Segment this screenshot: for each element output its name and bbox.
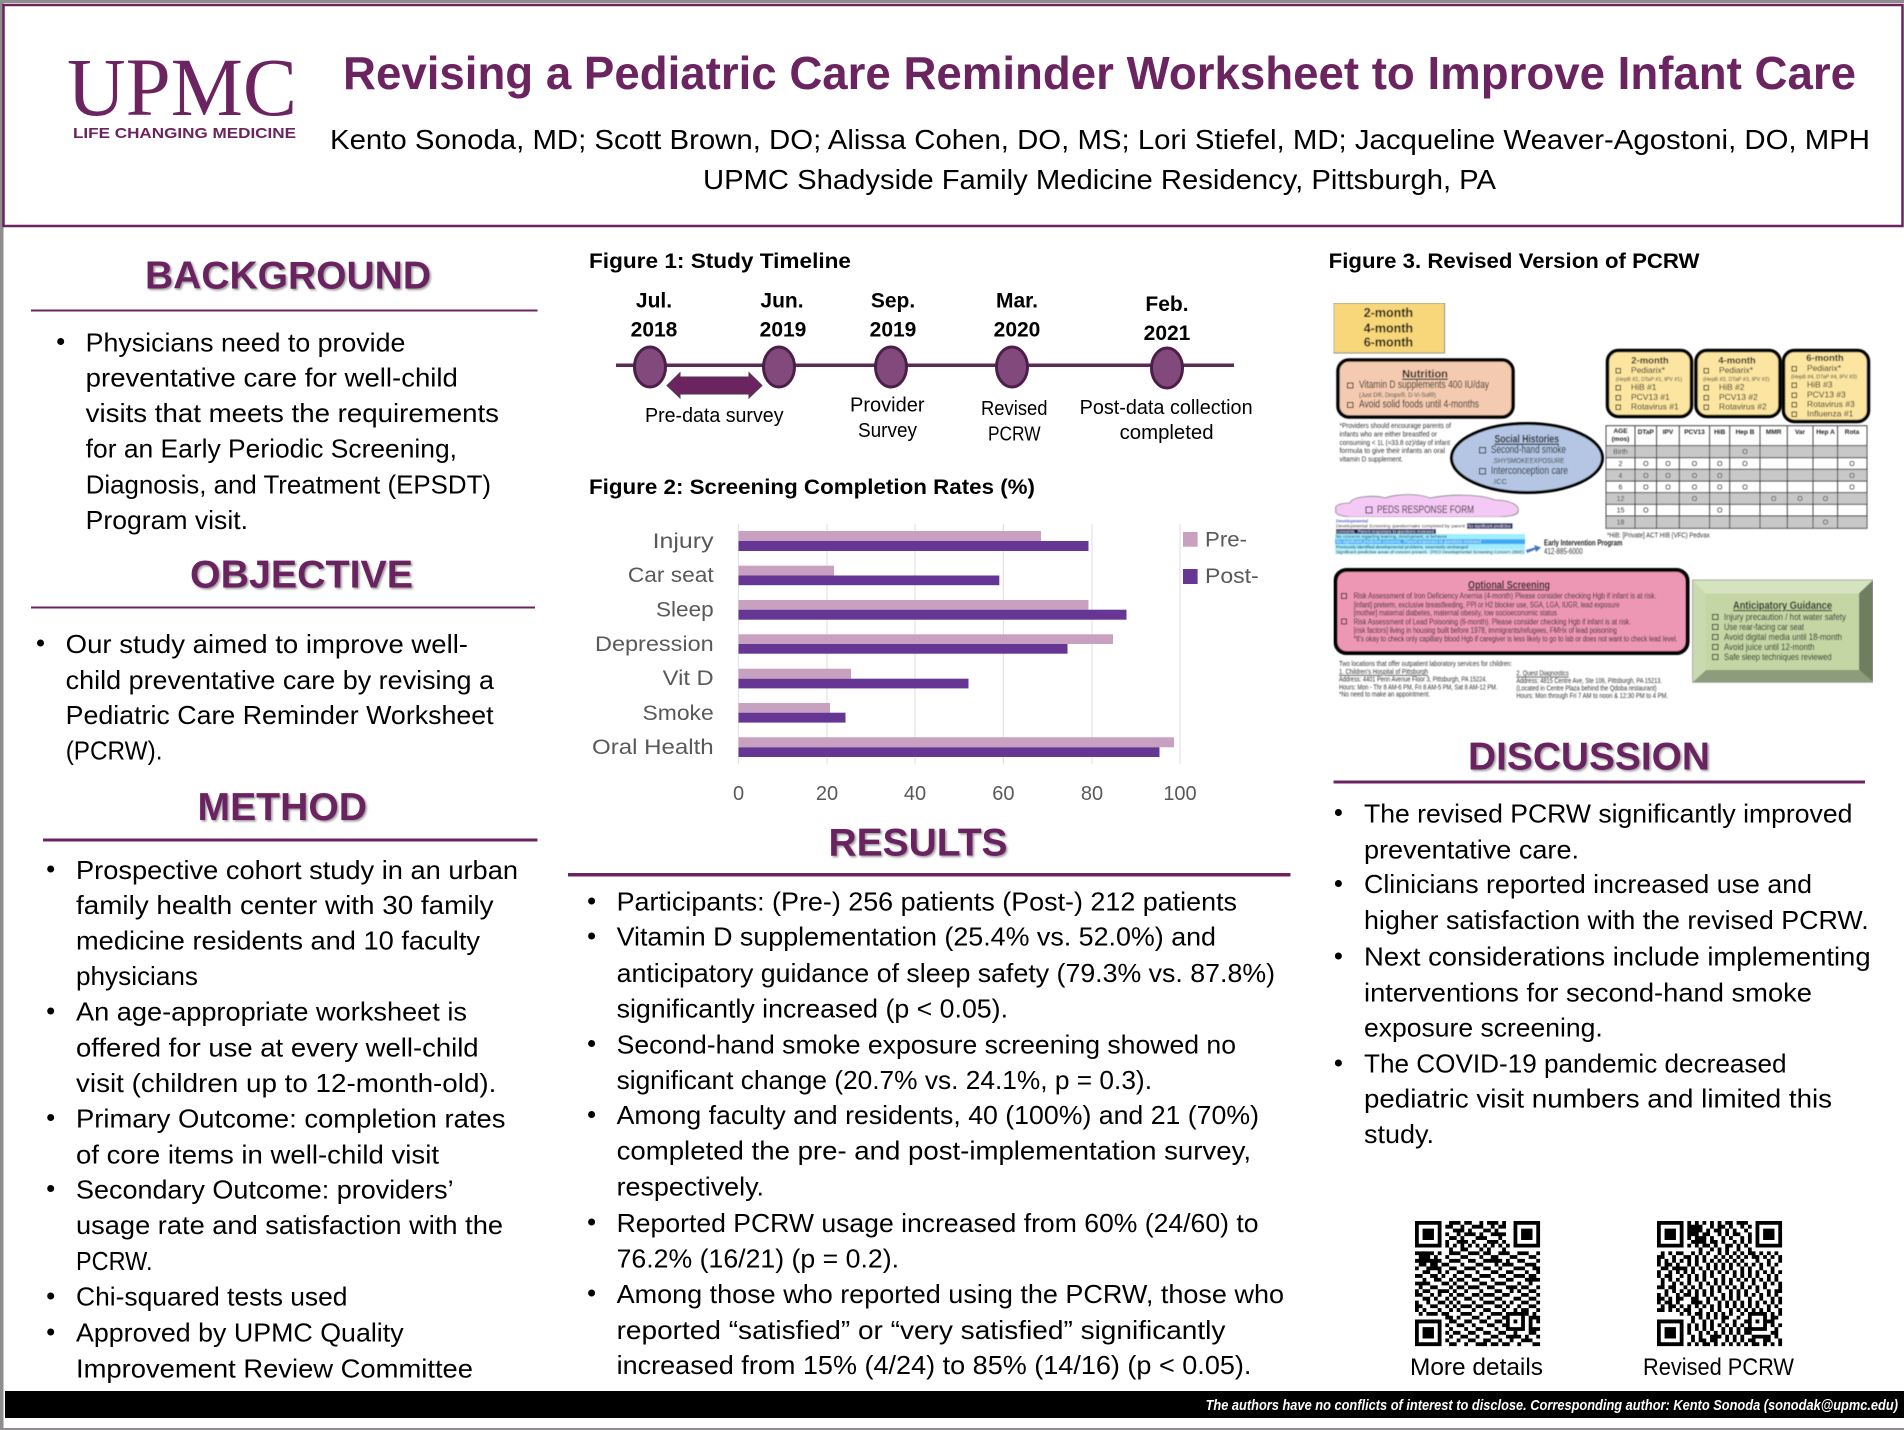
timeline dates: Jul.	[636, 290, 672, 313]
laboratory locations: Address: 4815 Centre Ave, Ste 106, Pittsburgh, PA 15213.	[1516, 676, 1662, 685]
axis labels: 40	[904, 783, 926, 805]
objective text: Our study aimed to improve well-	[66, 629, 468, 659]
timeline dates: 2019	[870, 319, 916, 342]
results bullet: PCRW usage	[588, 1208, 1258, 1273]
vaccine schedule table: O	[1692, 496, 1698, 503]
vaccine schedule table: O	[1643, 508, 1649, 514]
vaccine schedule table: O	[1797, 496, 1803, 503]
heading: discussion: DISCUSSION	[1468, 735, 1710, 778]
vaccine box: 6-month: Rotavirus #3	[1807, 399, 1855, 409]
discussion bullet: next considerations	[1335, 942, 1871, 1043]
timeline captions	[645, 394, 1253, 446]
category labels	[592, 530, 714, 759]
results bullet: PCRW usage: Reported PCRW usage increased from 60% (24/60) to	[617, 1208, 1258, 1238]
vaccine schedule table: O	[1849, 473, 1855, 480]
results bullet: satisfaction: increased from 15% (4/24) to 85% (14/16) (p < 0.05).	[617, 1350, 1251, 1380]
laboratory locations: Address: 4401 Penn Avenue Floor 3, Pittsburgh, PA 15224.	[1339, 674, 1487, 683]
timeline captions: completed	[1120, 421, 1214, 444]
panel: background	[31, 254, 538, 535]
vaccine box: 2-month: 2-month	[1631, 355, 1669, 366]
results bullet: survey completion: Among faculty and residents, 40 (100%) and 21 (70%)	[617, 1100, 1259, 1130]
panel: discussion	[1334, 735, 1871, 1149]
timeline dates: Mar.	[996, 290, 1038, 313]
social histories ellipse: Interconception care	[1491, 465, 1568, 477]
background text	[57, 328, 499, 535]
vaccine box: 2-month: Pediarix*	[1631, 365, 1666, 375]
legend: Post-	[1205, 565, 1259, 588]
timeline captions: Pre-data survey	[645, 404, 784, 427]
discussion bullet: improved care: preventative care.	[1364, 834, 1579, 864]
vaccine schedule table	[1606, 426, 1867, 528]
laboratory locations: Hours: Mon - Thr 8 AM-6 PM, Fri 8 AM-5 PM, Sat 8 AM-12 PM.	[1339, 682, 1498, 691]
anticipatory guidance box: Avoid juice until 12-month	[1724, 642, 1814, 653]
anticipatory guidance box: Injury precaution / hot water safety	[1724, 612, 1846, 623]
axis labels: 100	[1163, 783, 1197, 805]
peds response form cloud	[1336, 495, 1518, 517]
bar chart	[592, 524, 1259, 805]
vaccine schedule table: Var	[1795, 429, 1806, 436]
method bullet: primary outcome	[47, 1103, 505, 1170]
vaccine schedule table: O	[1717, 473, 1723, 480]
optional screening box: [infant] preterm, exclusive breastfeeding, PPI or H2 blocker use, SGA, LGA, IUGR, lead exposure	[1354, 600, 1620, 609]
laboratory locations: *No need to make an appointment.	[1339, 690, 1430, 699]
background text: Diagnosis, and Treatment (EPSDT)	[86, 469, 491, 499]
vaccine schedule table: O	[1823, 496, 1829, 503]
provider note: infants who are either breastfed or	[1340, 430, 1437, 439]
category labels: Oral Health	[592, 736, 714, 759]
pre bars	[738, 531, 1174, 747]
post bars	[738, 541, 1160, 757]
method bullet: chi-squared: Chi-squared tests used	[76, 1282, 348, 1312]
method bullet: secondary outcome: PCRW.	[76, 1246, 152, 1276]
figure 1: study timeline	[589, 250, 1253, 446]
results bullet: smoke exposure: Second-hand smoke exposure screening showed no	[617, 1030, 1236, 1060]
method bullet: secondary outcome	[47, 1174, 503, 1276]
method bullet: prospective cohort: family health center with 30 family	[76, 890, 494, 920]
discussion bullet: COVID-19: pediatric visit numbers and limited this	[1364, 1084, 1832, 1114]
header panel	[4, 5, 1902, 226]
provider note: *Providers should encourage parents of	[1340, 421, 1452, 430]
peds response table: No significant predictive	[1468, 524, 1511, 529]
axis labels: 80	[1081, 783, 1103, 805]
vaccine schedule table: 4	[1619, 473, 1623, 480]
provider note: formula to give their infants an oral	[1340, 446, 1445, 455]
QR code: revised PCRW	[1643, 1221, 1794, 1381]
background text: Program visit.	[86, 505, 248, 535]
panel: results	[568, 822, 1290, 1380]
vaccine schedule table: O	[1717, 461, 1723, 468]
discussion bullet: clinicians: higher satisfaction with the revised PCRW.	[1364, 905, 1869, 935]
figure 2 heading: Figure 2: Screening Completion Rates (%)	[589, 476, 1035, 499]
vaccine schedule table: Rota	[1845, 429, 1860, 436]
peds response table: No significant predictive concerns. Parent responses to questions reviewed	[1336, 539, 1481, 544]
vaccine schedule table: IPV	[1663, 429, 1674, 436]
optional screening box: Optional Screening	[1468, 579, 1550, 591]
method bullet: prospective cohort	[47, 855, 518, 991]
discussion bullet: improved care: The revised PCRW significantly improved	[1364, 798, 1852, 828]
vaccine box: 2-month: HiB #1	[1631, 382, 1657, 392]
footer bar	[5, 1391, 1904, 1418]
heading: method: METHOD	[198, 786, 367, 829]
results bullet: vitamin D and sleep: significantly increased (p < 0.05).	[617, 994, 1008, 1024]
visit age box	[1334, 303, 1444, 353]
objective text: child preventative care by revising a	[66, 665, 495, 695]
vaccine schedule table: O	[1665, 461, 1671, 468]
vaccine schedule table: O	[1643, 484, 1649, 492]
vaccine schedule table: O	[1742, 461, 1748, 468]
peds response table: Developmental	[1336, 518, 1368, 524]
category labels: Smoke	[642, 702, 714, 725]
axis labels	[733, 783, 1197, 805]
discussion bullet: next considerations: exposure screening.	[1364, 1013, 1603, 1043]
method bullet: worksheet	[47, 997, 496, 1098]
logo: UPMC Life Changing Medicine: LIFE CHANGING MEDICINE	[73, 125, 296, 142]
vaccine schedule table: O	[1643, 461, 1649, 468]
vaccine schedule table: O	[1665, 473, 1671, 480]
vaccine box: 6-month: 6-month	[1806, 353, 1844, 364]
timeline dates: 2019	[760, 319, 806, 342]
social histories ellipse: .ICC	[1492, 477, 1508, 486]
results bullet: vitamin D and sleep: Vitamin D supplementation (25.4% vs. 52.0%) and	[617, 922, 1216, 952]
method bullet: worksheet: offered for use at every well-child	[76, 1033, 479, 1063]
nutrition box: Vitamin D supplements 400 IU/day	[1359, 379, 1489, 391]
early intervention program: 412-885-6000	[1544, 547, 1583, 556]
method bullet: approval: Approved by UPMC Quality	[76, 1318, 404, 1348]
vaccine schedule table: O	[1849, 484, 1855, 492]
method bullet: primary outcome: of core items in well-child visit	[76, 1140, 440, 1170]
discussion bullet: next considerations: Next considerations include implementing	[1364, 942, 1871, 972]
anticipatory guidance box: Use rear-facing car seat	[1724, 622, 1804, 633]
panel: objective	[31, 554, 535, 766]
results bullet: vitamin D and sleep	[588, 922, 1275, 1024]
figure 1 heading: Figure 1: Study Timeline	[589, 250, 851, 273]
peds response table: No concerns regarding learning, development, or behavior	[1336, 534, 1447, 539]
laboratory locations: Hours: Mon through Fri 7 AM to noon & 12:30 PM to 4 PM.	[1516, 691, 1668, 700]
discussion bullet: COVID-19: The COVID-19 pandemic decreased	[1364, 1049, 1786, 1079]
anticipatory guidance box: Anticipatory Guidance	[1733, 600, 1832, 612]
results bullet: satisfaction: Among those who reported using the PCRW, those who	[617, 1279, 1284, 1309]
heading: results: RESULTS	[828, 822, 1008, 865]
vaccine box: 6-month: HiB #3	[1807, 380, 1833, 390]
vaccine schedule table: 2	[1619, 461, 1623, 468]
logo: UPMC Life Changing Medicine: UPMC	[67, 41, 297, 133]
figure 3 heading: Figure 3. Revised Version of PCRW	[1329, 250, 1700, 273]
discussion bullet: improved care	[1335, 798, 1852, 864]
results bullet: vitamin D and sleep: anticipatory guidance of sleep safety (79.3% vs. 87.8%)	[617, 958, 1275, 988]
background text: for an Early Periodic Screening,	[86, 433, 457, 463]
arrow: to early intervention	[1526, 545, 1541, 553]
method bullet: approval	[47, 1318, 473, 1384]
anticipatory guidance box	[1693, 580, 1873, 682]
timeline captions: Provider	[850, 394, 925, 417]
category labels: Vit D	[663, 667, 714, 690]
nutrition box: Nutrition	[1402, 369, 1448, 381]
visit age box: 4-month	[1364, 322, 1413, 336]
method bullet: secondary outcome: usage rate and satisfaction with the	[76, 1210, 503, 1240]
discussion bullet: next considerations: interventions for second-hand smoke	[1364, 978, 1812, 1008]
method bullet: primary outcome: Primary Outcome: completion rates	[76, 1103, 505, 1133]
laboratory locations: (Located in Centre Plaza behind the Qdoba restaurant)	[1516, 683, 1657, 692]
QR modules: more details	[1415, 1221, 1540, 1346]
vaccine box: 6-month: Influenza #1	[1807, 409, 1854, 419]
timeline dates: Jun.	[760, 290, 804, 313]
results bullet: survey completion: respectively.	[617, 1172, 764, 1202]
vaccine schedule table: DTaP	[1638, 429, 1655, 436]
laboratory locations	[1339, 659, 1668, 700]
heading: objective: OBJECTIVE	[190, 554, 413, 596]
vaccine schedule table: O	[1692, 484, 1698, 492]
optional screening box	[1336, 570, 1688, 653]
timeline dates	[631, 290, 1191, 345]
method bullet: prospective cohort: Prospective cohort study in an urban	[76, 855, 518, 885]
vaccine box: 4-month: (HepB #3, DTaP #3, IPV #2)	[1703, 377, 1770, 383]
vaccine box: 6-month: (HepB #4, DTaP #4, IPV #3)	[1791, 375, 1857, 381]
vaccine schedule table: O	[1849, 461, 1855, 468]
category labels: Sleep	[656, 599, 714, 622]
vaccine schedule table: O	[1742, 449, 1748, 456]
figure 2: screening completion rates	[589, 476, 1259, 805]
results bullet: survey completion: completed the pre- and post-implementation survey,	[617, 1136, 1251, 1166]
vaccine schedule table: 6	[1619, 484, 1623, 492]
results bullet: smoke exposure	[588, 1030, 1236, 1095]
method bullet: secondary outcome: Secondary Outcome: providers’	[76, 1174, 454, 1204]
timeline dates: 2018	[631, 319, 678, 342]
vaccine schedule table: O	[1692, 461, 1698, 468]
vaccine schedule table: (mos)	[1612, 436, 1629, 443]
vaccine box: 2-month: PCV13 #1	[1631, 392, 1670, 402]
vaccine schedule table: AGE	[1613, 428, 1628, 435]
authors: Kento Sonoda, MD; Scott Brown, DO; Alissa Cohen, DO, MS; Lori Stiefel, MD; Jacqueline Weaver-Agostoni, DO, MPH	[330, 124, 1870, 155]
QR code: more details	[1410, 1221, 1543, 1381]
vaccine schedule table: O	[1717, 508, 1723, 514]
results bullet: satisfaction: reported “satisfied” or “very satisfied” significantly	[617, 1315, 1225, 1345]
background text: Physicians need to provide	[86, 328, 405, 358]
provider note	[1340, 421, 1452, 464]
peds response table: Previously identified developmental problems, essentially unchanged	[1336, 544, 1468, 549]
vaccine schedule table: Hep B	[1736, 429, 1755, 436]
early intervention program	[1544, 538, 1623, 556]
vaccine schedule table: PCV13	[1684, 429, 1705, 436]
vaccine schedule table: 12	[1617, 496, 1624, 503]
method bullet: worksheet: An age-appropriate worksheet is	[76, 997, 467, 1027]
peds response form cloud: PEDS RESPONSE FORM	[1377, 504, 1474, 516]
vaccine schedule table: Hep A	[1816, 429, 1835, 436]
vaccine box: 6-month	[1784, 350, 1868, 422]
title: Revising a Pediatric Care Reminder Worksheet to Improve Infant Care	[343, 47, 1856, 99]
optional screening box: Risk Assessment of Lead Poisoning (6-month). Please consider checking Hgb if infant is at risk.	[1354, 617, 1631, 626]
QR modules: revised PCRW	[1657, 1221, 1782, 1346]
vaccine box: 2-month: Rotavirus #1	[1631, 401, 1679, 411]
discussion bullet: clinicians: Clinicians reported increased use and	[1364, 869, 1812, 899]
axis labels: 60	[992, 783, 1015, 805]
timeline dates: Sep.	[871, 290, 915, 313]
optional screening box: [risk factors] living in housing built before 1978, immigrants/refugees, FMHx of lead poisoning	[1354, 626, 1617, 635]
vaccine schedule table: 15	[1617, 508, 1624, 514]
visit age box: 6-month	[1364, 336, 1413, 350]
vaccine schedule table: 18	[1617, 520, 1624, 526]
vaccine schedule table: O	[1692, 473, 1698, 480]
legend: Pre-	[1205, 529, 1247, 552]
timeline captions: Post-data collection	[1080, 396, 1253, 419]
category labels: Injury	[653, 530, 714, 553]
affiliation: UPMC Shadyside Family Medicine Residency, Pittsburgh, PA	[703, 164, 1496, 195]
results bullet: satisfaction	[588, 1279, 1284, 1380]
heading: background: BACKGROUND	[145, 254, 431, 298]
vaccine box: 6-month: Pediarix*	[1807, 363, 1842, 373]
timeline line	[616, 364, 1234, 367]
anticipatory guidance box: Safe sleep techniques reviewed	[1724, 652, 1832, 663]
optional screening box: Risk Assessment of Iron Deficiency Anemia (4-month) Please consider checking Hgb if infant is at risk.	[1354, 592, 1657, 601]
peds response table: Significant predictive areas of concern present. (PEO Developmental Screening Concern Z80E)	[1336, 549, 1524, 554]
background text: visits that meets the requirements	[86, 398, 499, 428]
vaccine schedule table: O	[1643, 473, 1649, 480]
objective text: (PCRW).	[66, 736, 162, 766]
method bullet: prospective cohort: physicians	[76, 961, 198, 991]
early intervention program: Early Intervention Program	[1544, 538, 1623, 548]
vaccine schedule table: Birth	[1613, 449, 1628, 456]
vaccine box: 4-month: HiB #2	[1719, 382, 1745, 392]
category labels: Depression	[595, 633, 714, 656]
discussion bullet: COVID-19: study.	[1364, 1119, 1434, 1149]
timeline markers	[634, 347, 1182, 388]
background text: preventative care for well-child	[86, 363, 458, 393]
vaccine box: 4-month: Rotavirus #2	[1719, 401, 1767, 411]
axis labels: 0	[733, 783, 744, 805]
social histories ellipse	[1452, 424, 1602, 492]
vaccine schedule table: HiB	[1714, 429, 1726, 436]
vaccine schedule table: O	[1717, 484, 1723, 492]
method bullet: approval: Improvement Review Committee	[76, 1354, 473, 1384]
vaccine table footnote: *HiB: [Private] ACT HIB (VFC) Pedvax	[1607, 530, 1710, 539]
results bullet: participants: Participants: (Pre-) 256 patients (Post-) 212 patients	[617, 886, 1237, 916]
peds response table	[1334, 517, 1525, 554]
nutrition box: Avoid solid foods until 4-months	[1359, 399, 1479, 411]
timeline captions: Revised	[981, 397, 1048, 420]
results bullet: PCRW usage: 76.2% (16/21) (p = 0.2).	[617, 1243, 899, 1273]
laboratory locations: 1. Children's Hospital of Pittsburgh	[1339, 667, 1428, 676]
discussion bullet: clinicians	[1335, 869, 1869, 935]
laboratory locations: Two locations that offer outpatient laboratory services for children:	[1339, 659, 1512, 668]
anticipatory guidance box: Avoid digital media until 18-month	[1724, 632, 1842, 643]
vaccine box: 4-month: Pediarix*	[1719, 365, 1754, 375]
optional screening box: [mother] maternal diabetes, maternal obesity, low socioeconomic status	[1354, 608, 1557, 617]
vaccine schedule table: O	[1823, 520, 1829, 526]
vaccine schedule table: O	[1771, 496, 1777, 503]
category labels: Car seat	[628, 564, 714, 587]
worksheet image	[1334, 303, 1873, 700]
vaccine box: 6-month: PCV13 #3	[1807, 390, 1846, 400]
timeline dates: 2020	[994, 319, 1040, 342]
timeline dates: 2021	[1144, 322, 1191, 345]
timeline captions: Survey	[858, 419, 918, 442]
method bullet: worksheet: visit (children up to 12-month-old).	[76, 1068, 496, 1098]
vaccine schedule table: O	[1742, 484, 1748, 492]
peds response table: concerns. Parent responses to questions reviewed	[1337, 529, 1434, 534]
objective text	[37, 629, 495, 766]
vaccine box: 4-month	[1696, 350, 1780, 416]
panel: method	[43, 786, 538, 1384]
objective text: Pediatric Care Reminder Worksheet	[66, 700, 494, 730]
vaccine box: 4-month: PCV13 #2	[1719, 392, 1758, 402]
axis labels: 20	[816, 783, 838, 805]
social histories ellipse: Social Histories	[1494, 434, 1559, 446]
nutrition box	[1338, 360, 1513, 417]
timeline captions: PCRW	[988, 423, 1041, 446]
provider note: vitamin D supplement.	[1340, 455, 1403, 464]
peds response table: Developmental Screening questionnaire completed by parent:	[1336, 524, 1466, 529]
social histories ellipse: Second-hand smoke	[1491, 444, 1566, 456]
QR label: revised PCRW: Revised PCRW	[1643, 1354, 1794, 1381]
nutrition box: (Just D®, Drops®, D-Vi-Sol®)	[1359, 391, 1436, 399]
arrow: pre-data survey span	[667, 373, 762, 398]
provider note: consuming < 1L (≈33.8 oz)/day of infant	[1340, 438, 1451, 447]
results bullet: survey completion	[588, 1100, 1259, 1202]
laboratory locations: 2. Quest Diagnostics	[1516, 669, 1569, 678]
legend	[1183, 529, 1259, 588]
vaccine box: 4-month: 4-month	[1718, 355, 1756, 366]
method bullet: prospective cohort: medicine residents and 10 faculty	[76, 925, 480, 955]
timeline dates: Feb.	[1145, 293, 1189, 316]
vaccine box: 2-month	[1608, 350, 1692, 416]
discussion bullet: COVID-19	[1335, 1049, 1832, 1149]
vaccine schedule table: O	[1665, 484, 1671, 492]
figure 3: revised version of PCRW	[1329, 250, 1873, 700]
vaccine schedule table: MMR	[1766, 429, 1782, 436]
social histories ellipse: .SHYSMOKEEXPOSURE	[1492, 456, 1564, 465]
QR label: more details: More details	[1410, 1354, 1543, 1381]
results bullet: smoke exposure: significant change (20.7% vs. 24.1%, p = 0.3).	[617, 1065, 1152, 1095]
visit age box: 2-month	[1364, 306, 1413, 320]
optional screening box: *It's okay to check only capillary blood Hgb if caregiver is less likely to go to lab or does not want to check lead level.	[1354, 635, 1677, 644]
vaccine box: 2-month: (HepB #2, DTaP #1, IPV #1)	[1616, 377, 1682, 383]
